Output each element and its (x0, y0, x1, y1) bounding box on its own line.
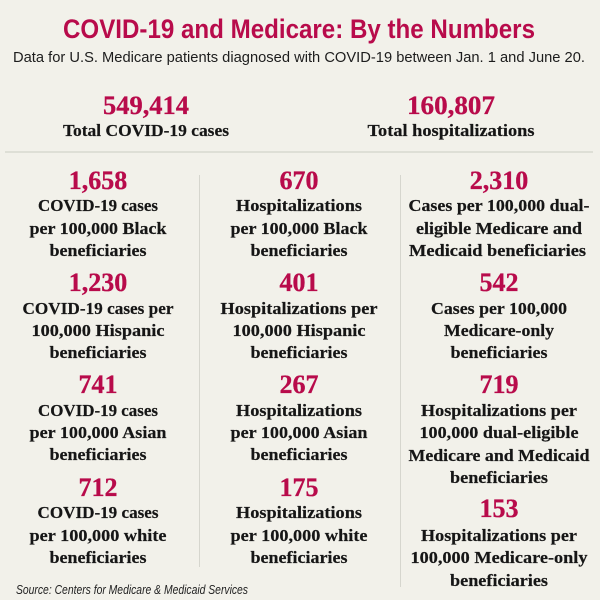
stat: white cases: COVID-19 cases (38, 503, 159, 522)
stat: Hispanic hospitalizations: 401 (280, 268, 318, 297)
source note: Source: Centers for Medicare & Medicaid Services (16, 582, 248, 597)
stat: Hispanic cases: 1,230 (69, 268, 127, 297)
stat: Asian hospitalizations: 267 (280, 370, 318, 399)
stat: Asian cases: beneficiaries (50, 445, 147, 464)
stat: Medicare-only hospitalizations: beneficiaries (450, 571, 549, 590)
stat: Asian hospitalizations: per 100,000 Asian (230, 423, 368, 442)
column: cases by race (22, 166, 174, 567)
stat: total cases: Total COVID-19 cases (63, 121, 230, 140)
stat: Asian cases (30, 370, 166, 464)
stat: Medicare-only cases (431, 268, 567, 362)
stat: total hospitalizations (368, 91, 535, 140)
stat: Hispanic hospitalizations: 100,000 Hispanic (232, 321, 366, 340)
stat: dual-eligible hospitalizations: 719 (480, 370, 518, 399)
stat: Black cases: 1,658 (69, 166, 127, 195)
stat: Medicare-only cases: beneficiaries (450, 343, 548, 362)
stat: Hispanic hospitalizations: beneficiaries (250, 343, 348, 362)
stat: Black hospitalizations (230, 166, 368, 260)
stat: Asian cases: 741 (78, 370, 118, 399)
stat: Asian hospitalizations: beneficiaries (250, 445, 348, 464)
stat: Asian cases: per 100,000 Asian (30, 423, 166, 442)
stat: white cases (30, 473, 166, 567)
stat: total hospitalizations: 160,807 (407, 91, 495, 120)
stat: Black hospitalizations: 670 (280, 166, 318, 195)
stat: Medicare-only cases: 542 (480, 268, 518, 297)
stat: dual-eligible hospitalizations: beneficiaries (450, 468, 549, 487)
stat: Black cases: beneficiaries (50, 241, 147, 260)
stat: white hospitalizations (230, 473, 368, 567)
stat: Black cases (30, 166, 167, 260)
stat: Black hospitalizations: per 100,000 Black (230, 219, 368, 238)
stat: Medicare-only cases: Cases per 100,000 (431, 299, 567, 318)
stat: dual-eligible hospitalizations: 100,000 dual-eligible (420, 423, 578, 442)
stat: Asian cases: COVID-19 cases (38, 401, 159, 420)
stat: total cases (63, 91, 230, 140)
stat: Hispanic hospitalizations: Hospitalizations per (220, 299, 378, 318)
stat: Black cases: COVID-19 cases (38, 196, 159, 215)
stat: total hospitalizations: Total hospitalizations (368, 121, 535, 140)
column: hospitalizations by race (220, 166, 378, 567)
stat: Hispanic cases: beneficiaries (50, 343, 147, 362)
title: COVID-19 and Medicare: By the Numbers (63, 14, 535, 44)
stat: Hispanic hospitalizations (220, 268, 378, 362)
stat: Medicare-only hospitalizations: 153 (480, 494, 518, 523)
stat: Medicare-only hospitalizations: 100,000 Medicare-only (410, 548, 588, 567)
stat: Medicare-only hospitalizations (410, 494, 588, 590)
stat: Hispanic cases: 100,000 Hispanic (32, 321, 164, 340)
stat: dual-eligible cases: Cases per 100,000 dual- (408, 196, 590, 215)
stat: Medicare-only cases: Medicare-only (444, 321, 555, 340)
stat: Hispanic cases: COVID-19 cases per (22, 299, 174, 318)
stat: white cases: 712 (78, 473, 118, 502)
stat: dual-eligible cases: Medicaid beneficiaries (409, 241, 587, 260)
stat: Black cases: per 100,000 Black (30, 219, 167, 238)
stat: dual-eligible cases: 2,310 (470, 166, 528, 195)
column: dual-eligible vs Medicare-only (408, 166, 590, 590)
stat: Asian hospitalizations (230, 370, 368, 464)
stat: Black hospitalizations: beneficiaries (250, 241, 348, 260)
subtitle: Data for U.S. Medicare patients diagnosed with COVID-19 between Jan. 1 and June 20. (13, 49, 585, 66)
stat: white cases: per 100,000 white (30, 526, 166, 545)
stat: total cases: 549,414 (103, 91, 189, 120)
stat: Asian hospitalizations: Hospitalizations (236, 401, 363, 420)
stat: white hospitalizations: beneficiaries (250, 548, 348, 567)
stat: Hispanic cases (22, 268, 174, 362)
stat: dual-eligible hospitalizations (408, 370, 590, 487)
stat: dual-eligible cases (408, 166, 590, 260)
stat: Medicare-only hospitalizations: Hospitalizations per (421, 526, 577, 545)
stat: dual-eligible cases: eligible Medicare and (416, 219, 582, 238)
stat: white hospitalizations: per 100,000 white (230, 526, 368, 545)
stat: Black hospitalizations: Hospitalizations (236, 196, 363, 215)
stat: white hospitalizations: 175 (280, 473, 318, 502)
stat: dual-eligible hospitalizations: Medicare and Medicaid (408, 446, 590, 465)
stat: white cases: beneficiaries (50, 548, 147, 567)
stat: white hospitalizations: Hospitalizations (236, 503, 363, 522)
stat: dual-eligible hospitalizations: Hospitalizations per (421, 401, 577, 420)
